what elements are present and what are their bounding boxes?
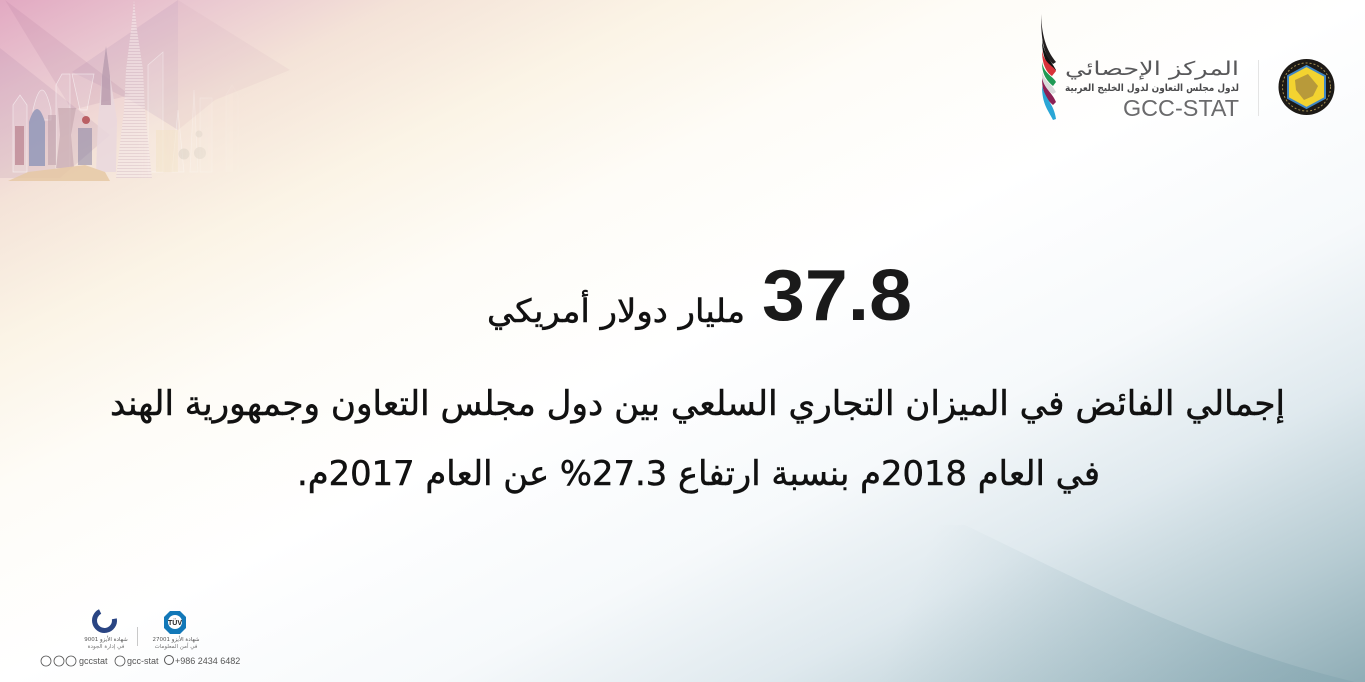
label: ISO 27001: شهادة الأيزو 27001 [152,635,200,643]
background wave bottom right [880,525,1355,682]
illustration: Gulf city skyline [8,2,206,181]
certificate: ISO 27001: في أمن المعلومات [155,642,198,650]
description line 1: إجمالي الفائض في الميزان التجاري السلعي بين دول مجلس التعاون وجمهورية الهند [110,384,1285,424]
tower: Al Hamra pointed tower [96,74,116,172]
logo: Arabic subtitle: لدول مجلس التعاون لدول الخليج العربية [1065,83,1239,94]
ground: sand strip [8,165,110,181]
decorative facets top left [0,0,290,178]
tower: left stripe block [48,115,56,165]
headline figure: 37.8 [762,256,912,336]
certificate: ISO 27001 [152,611,200,650]
icon: red sphere [82,116,90,124]
social icons: facebook twitter instagram [41,656,76,666]
social handle: gcc-stat: gcc-stat [127,656,159,666]
logo: Arabic name: المركز الإحصائي [1065,58,1239,80]
icon: TUV badge: TÜV [168,618,182,627]
description line 2: في العام 2018م بنسبة ارتفاع 27.3% عن العام 2017م. [297,454,1100,494]
icon: whatsapp [164,656,174,664]
emblem: GCC seal [1278,59,1334,115]
certificate divider [137,627,138,646]
logo divider [1258,60,1259,116]
logo: GCC-STAT: GCC-STAT [1123,95,1239,121]
tower: cream building [156,130,178,172]
certificate: ISO 9001: في إدارة الجودة [88,644,125,650]
icon: ISO 9001 badge [93,609,116,632]
tower: Burj Khalifa [116,0,152,178]
tower: blue Doha tower [29,109,45,166]
icon: Kuwait towers spheres [178,130,206,160]
headline unit: مليار دولار أمريكي [487,290,745,330]
logo: ribbon [1041,14,1056,120]
icon: linkedin [115,656,125,666]
social handle: gccstat: gccstat [79,656,108,666]
phone number: +986 2434 6482 [175,656,240,666]
certificate: ISO 9001 [84,609,128,650]
label: ISO 9001: شهادة الأيزو 9001 [84,635,128,643]
tower: outline skyscrapers [12,52,204,172]
tower: Kingdom Centre [56,108,76,168]
tower: Faisaliah [78,128,92,165]
tower: red Oman tower [15,126,24,165]
